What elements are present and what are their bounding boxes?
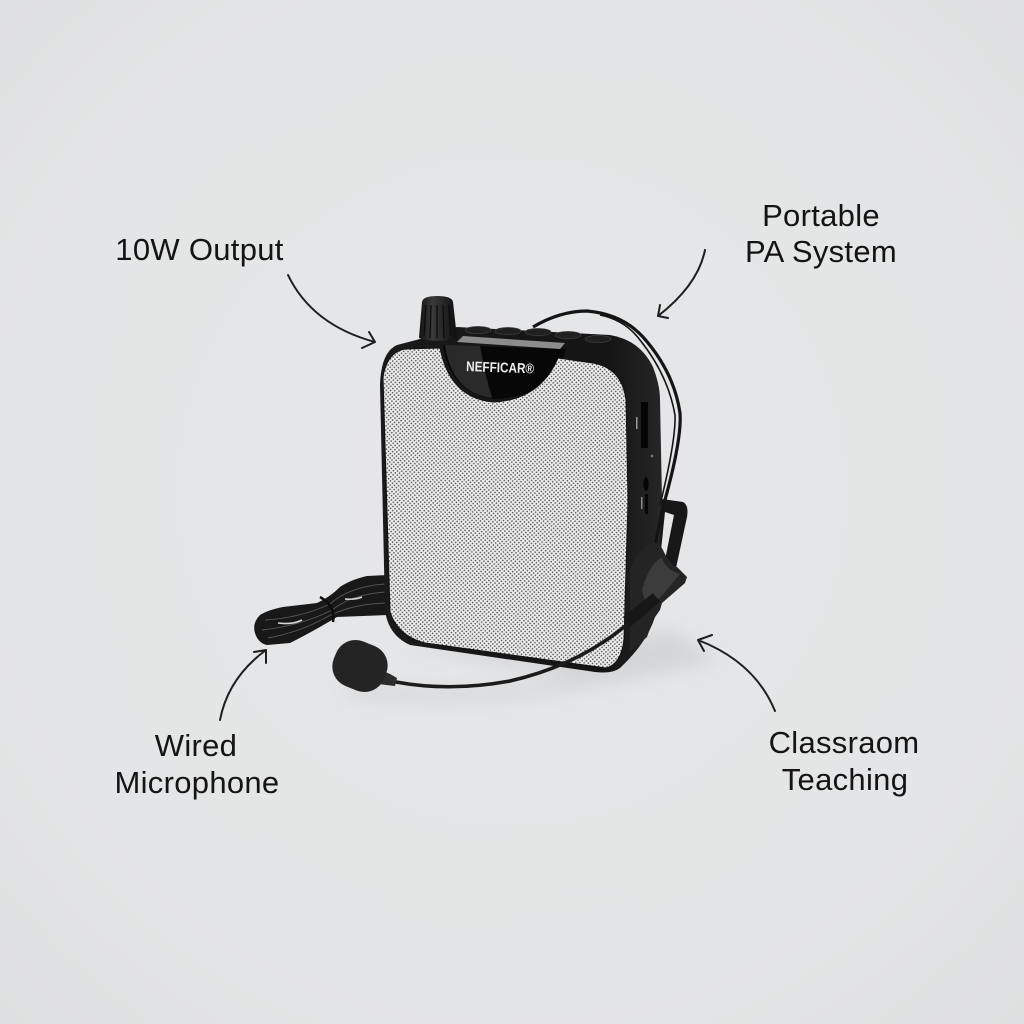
side ports [636, 402, 653, 514]
callout: Wired Microphone: Microphone [115, 765, 279, 800]
speaker grille [383, 348, 628, 668]
callout: Portable PA System: Portable [762, 198, 880, 233]
headset cable [533, 311, 680, 545]
callout: Wired Microphone [115, 650, 279, 800]
belt clip [652, 498, 688, 568]
callout: Portable PA System [658, 198, 897, 318]
callout: 10W Output: 10W Output [115, 232, 284, 267]
callout: Wired Microphone: Wired [155, 728, 237, 763]
headset clip [630, 542, 687, 652]
top buttons [465, 326, 611, 343]
callout: 10W Output [115, 232, 375, 348]
top face highlight strip [457, 336, 565, 349]
callout: Portable PA System: PA System [745, 234, 897, 269]
callout: Classroom Teaching [698, 635, 919, 797]
microphone boom [376, 593, 660, 687]
volume knob [419, 296, 457, 341]
cable coil [254, 575, 388, 645]
callout: Classroom Teaching: Teaching [782, 762, 908, 797]
speaker body [380, 327, 662, 672]
callout: Classroom Teaching: Classraom [769, 725, 919, 760]
microphone foam windscreen [326, 634, 394, 698]
product: portable speaker with headset microphone [254, 296, 720, 701]
brand logo: NEFFICAR® [466, 358, 535, 376]
floor shadow [345, 630, 720, 701]
logo panel [443, 345, 566, 399]
